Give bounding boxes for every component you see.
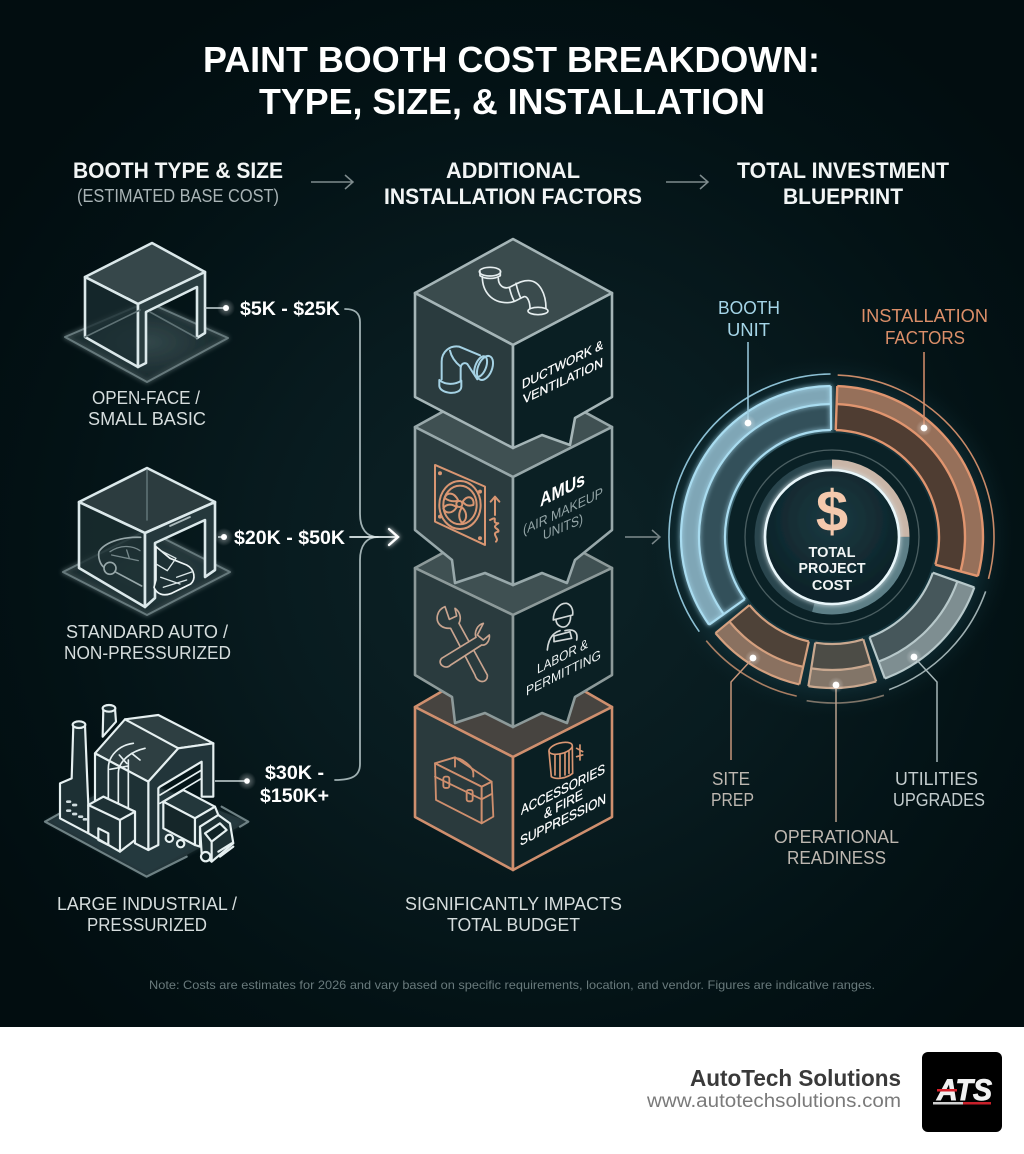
logo: ATS bbox=[922, 1052, 1002, 1132]
text: accessories and fire suppression: & FIRE bbox=[544, 786, 583, 823]
label: operational readiness: OPERATIONAL bbox=[774, 827, 899, 847]
donut chart: total investment blueprint bbox=[605, 310, 1024, 764]
icon: crossed tools bbox=[437, 607, 489, 681]
center disk bbox=[765, 470, 899, 604]
heading: booth type and size: BOOTH TYPE & SIZE bbox=[73, 158, 283, 183]
icon: large industrial booth bbox=[45, 705, 248, 877]
icon: open-face booth bbox=[65, 243, 228, 382]
logo: ATS: ATS bbox=[936, 1074, 992, 1107]
label: large industrial bbox=[57, 894, 237, 935]
cube: labor and permitting bbox=[415, 515, 612, 727]
label: open-face: SMALL BASIC bbox=[88, 409, 206, 429]
label: open-face bbox=[88, 388, 206, 429]
label: large industrial: LARGE INDUSTRIAL / bbox=[57, 894, 237, 914]
leader: industrial price bbox=[215, 772, 256, 790]
price: large industrial: $150K+ bbox=[260, 786, 329, 807]
text: labor and permitting: LABOR & bbox=[537, 636, 588, 678]
icon: elbow duct bbox=[439, 346, 496, 393]
segment: booth unit bbox=[605, 310, 1024, 764]
text: accessories and fire suppression bbox=[520, 762, 606, 850]
leader: installation factors bbox=[916, 352, 932, 436]
label: utilities upgrades bbox=[893, 769, 985, 810]
icon: standard auto booth bbox=[63, 468, 230, 615]
title bbox=[203, 39, 820, 122]
text: ductwork and ventilation: DUCTWORK & bbox=[522, 337, 603, 392]
icon: car in booth bbox=[99, 537, 194, 595]
title: TYPE, SIZE, & INSTALLATION bbox=[259, 81, 765, 122]
label: installation factors: FACTORS bbox=[885, 328, 965, 348]
text: total project cost bbox=[798, 545, 866, 594]
text: amus: AMUs bbox=[540, 468, 585, 512]
heading: total investment blueprint bbox=[737, 158, 950, 209]
price: standard auto: $20K - $50K bbox=[234, 528, 345, 549]
label: significantly impacts total budget: SIGNIFICANTLY IMPACTS bbox=[405, 894, 622, 914]
leader: open-face price bbox=[205, 299, 235, 317]
arrow: column two to donut bbox=[625, 530, 660, 544]
icon: filter cartridge bbox=[548, 740, 583, 778]
footer brand text: www.autotechsolutions.com bbox=[646, 1091, 901, 1112]
text: labor and permitting: PERMITTING bbox=[526, 647, 601, 700]
leader: booth unit bbox=[740, 342, 756, 431]
label: standard auto: STANDARD AUTO / bbox=[66, 622, 228, 642]
text: ductwork and ventilation: VENTILATION bbox=[523, 355, 603, 407]
label: significantly impacts total budget bbox=[405, 894, 622, 935]
arrow: heading two to three bbox=[666, 175, 708, 189]
bracket connector with arrow bbox=[335, 309, 398, 780]
icon: dollar sign: $ bbox=[816, 479, 848, 544]
label: open-face: OPEN-FACE / bbox=[92, 388, 200, 408]
footer brand text: AutoTech Solutions bbox=[690, 1065, 901, 1091]
text: total project cost: COST bbox=[812, 578, 852, 594]
label: site prep: SITE bbox=[712, 769, 750, 789]
leader: standard auto price bbox=[215, 528, 233, 546]
cube: ductwork and ventilation bbox=[415, 239, 612, 448]
leader: operational readiness bbox=[828, 677, 844, 822]
label: large industrial: PRESSURIZED bbox=[87, 915, 207, 935]
label: site prep bbox=[711, 769, 754, 810]
icon: fan unit bbox=[435, 465, 499, 545]
price: large industrial: $30K - bbox=[265, 763, 324, 784]
footer panel bbox=[0, 1027, 1024, 1154]
title: PAINT BOOTH COST BREAKDOWN: bbox=[203, 39, 820, 80]
cube: air makeup units bbox=[415, 373, 612, 585]
cube: accessories and fire suppression bbox=[415, 650, 612, 870]
text: total project cost: TOTAL bbox=[809, 545, 856, 561]
heading: additional installation factors bbox=[384, 158, 642, 209]
text: accessories and fire suppression: SUPPRESSION bbox=[520, 792, 606, 850]
leader: site prep bbox=[731, 650, 761, 760]
text: amus: UNITS) bbox=[543, 512, 583, 544]
heading: total investment blueprint: BLUEPRINT bbox=[783, 184, 904, 209]
icon: toolbox bbox=[435, 757, 493, 823]
label: utilities upgrades: UTILITIES bbox=[895, 769, 978, 789]
label: installation factors bbox=[861, 306, 988, 348]
heading: total investment blueprint: TOTAL INVESTMENT bbox=[737, 158, 950, 183]
arrow: heading one to two bbox=[311, 175, 353, 189]
label: installation factors: INSTALLATION bbox=[861, 306, 988, 326]
cube stack: installation factors bbox=[415, 239, 612, 870]
price: large industrial bbox=[260, 763, 329, 807]
label: booth unit: UNIT bbox=[727, 320, 770, 340]
text: total project cost: PROJECT bbox=[798, 561, 866, 577]
price: open-face: $5K - $25K bbox=[240, 299, 340, 320]
heading: booth type and size: (ESTIMATED BASE COST) bbox=[77, 186, 279, 206]
inner dark well bbox=[728, 433, 936, 641]
icon: S-bend duct bbox=[479, 267, 548, 315]
footer brand text bbox=[646, 1065, 901, 1112]
text: amus: (AIR MAKEUP bbox=[523, 485, 603, 539]
label: utilities upgrades: UPGRADES bbox=[893, 790, 985, 810]
heading: additional installation factors: ADDITIONAL bbox=[446, 158, 580, 183]
label: operational readiness: READINESS bbox=[787, 848, 886, 868]
leader: utilities upgrades bbox=[906, 649, 937, 762]
inner progress ring bbox=[760, 465, 904, 609]
label: standard auto: NON-PRESSURIZED bbox=[64, 643, 231, 663]
label: site prep: PREP bbox=[711, 790, 754, 810]
text: accessories and fire suppression: ACCESSORIES bbox=[521, 762, 605, 819]
inner thin ring bbox=[745, 450, 919, 624]
label: booth unit bbox=[718, 298, 780, 340]
heading: booth type and size bbox=[73, 158, 283, 206]
icon: worker bbox=[547, 603, 577, 650]
heading: additional installation factors: INSTALLATION FACTORS bbox=[384, 184, 642, 209]
label: booth unit: BOOTH bbox=[718, 298, 780, 318]
segment: utilities upgrades bbox=[624, 329, 1024, 745]
segment: installation factors bbox=[664, 369, 1000, 705]
footnote: Note: Costs are estimates for 2026 and vary based on specific requirements, location, and vendor. Figures are indicative ranges. bbox=[149, 978, 875, 992]
label: standard auto bbox=[64, 622, 231, 663]
segment: operational readiness bbox=[626, 329, 1024, 745]
segment: site prep bbox=[638, 343, 1024, 731]
label: significantly impacts total budget: TOTAL BUDGET bbox=[447, 915, 580, 935]
label: operational readiness bbox=[774, 827, 899, 868]
